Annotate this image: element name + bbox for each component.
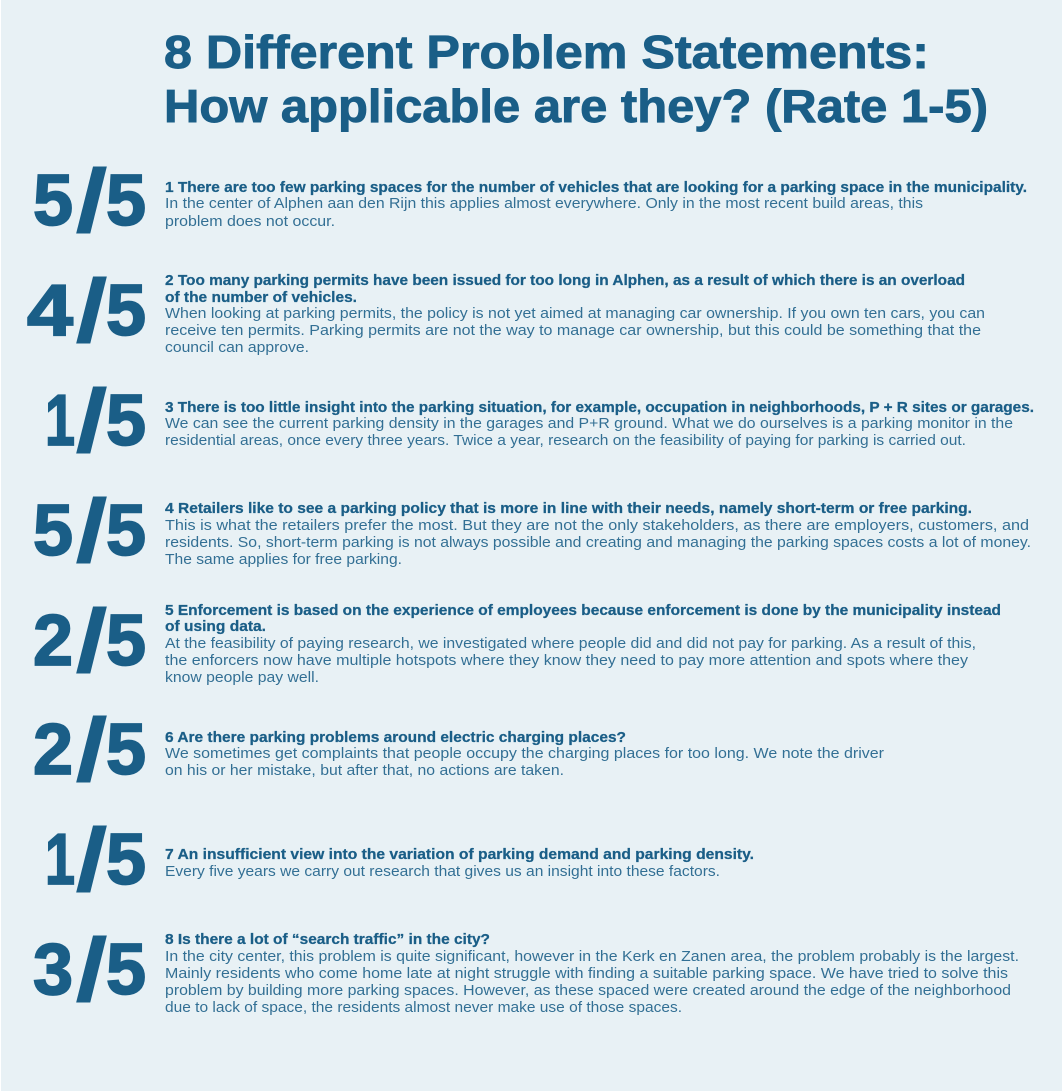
statement 5 text: of using data. — [165, 619, 266, 635]
statement 2 text: receive ten permits. Parking permits are not the way to manage car ownership, but this could be something that the — [165, 323, 981, 339]
rating 2: 4/5: 4 — [27, 271, 73, 351]
statement 2 — [27, 262, 985, 362]
statement 2 text: council can approve. — [165, 340, 309, 356]
statement 3 text: residential areas, once every three years. Twice a year, research on the feasibility of paying for parking is carried out. — [165, 433, 966, 449]
statement 5 text: At the feasibility of paying research, we investigated where people did and did not pay for parking. As a result of this, — [165, 636, 976, 652]
statement 5 text: 5 Enforcement is based on the experience of employees because enforcement is done by the municipality instead — [165, 603, 1001, 619]
statement 3 text: We can see the current parking density in the garages and P+R ground. What we do ourselves is a parking monitor in the — [165, 416, 1013, 432]
statement 6 text: on his or her mistake, but after that, no actions are taken. — [165, 763, 564, 779]
statement 5 text: know people pay well. — [165, 670, 319, 686]
statement 1 text: problem does not occur. — [165, 214, 335, 230]
statement 3 text — [165, 400, 1034, 449]
statement 6 — [33, 701, 884, 801]
statement 6 text: We sometimes get complaints that people occupy the charging places for too long. We note the driver — [165, 746, 884, 762]
rating 8: 3/5: / — [75, 921, 108, 1021]
rating 5: 2/5: / — [75, 592, 108, 692]
rating 6: 2/5: 2 — [33, 710, 73, 790]
rating 7: 1/5: 1 — [45, 820, 75, 900]
rating 6: 2/5: 5 — [106, 710, 146, 790]
rating 2: 4/5: / — [75, 262, 108, 362]
statement 8 text: In the city center, this problem is quite significant, however in the Kerk en Zanen area, the problem probably is the largest. — [165, 949, 1019, 965]
statement 3 text: 3 There is too little insight into the parking situation, for example, occupation in neighborhoods, P + R sites or garages. — [165, 400, 1034, 416]
rating 1: 5/5: 5 — [106, 161, 146, 241]
statement 2 text: When looking at parking permits, the policy is not yet aimed at managing car ownership. If you own ten cars, you can — [165, 306, 985, 322]
rating 7: 1/5: / — [75, 811, 108, 911]
statement 8 text — [165, 932, 1019, 1016]
statement 5 text — [165, 603, 1001, 686]
statement 3 — [45, 372, 1034, 472]
statement 4 text: This is what the retailers prefer the most. But they are not the only stakeholders, as there are employers, customers, and — [165, 518, 1029, 534]
statement 1 text: In the center of Alphen aan den Rijn this applies almost everywhere. Only in the most recent build areas, this — [165, 196, 923, 212]
statement 2 text — [165, 273, 985, 356]
rating 7: 1/5: 5 — [106, 820, 146, 900]
statement 4 text: residents. So, short-term parking is not always possible and creating and managing the parking spaces costs a lot of money. — [165, 535, 1031, 551]
statement 6 text — [165, 730, 884, 779]
statement 6 text: 6 Are there parking problems around electric charging places? — [165, 730, 626, 746]
statement 1 text: 1 There are too few parking spaces for the number of vehicles that are looking for a parking space in the municipality. — [165, 180, 1027, 196]
rating 3: 1/5: / — [75, 372, 108, 472]
rating 2: 4/5: 5 — [106, 271, 146, 351]
title — [164, 26, 988, 132]
rating 5: 2/5: 5 — [106, 601, 146, 681]
statement 8 — [33, 921, 1019, 1021]
statement 1 text — [165, 180, 1027, 230]
statement 8 text: problem by building more parking spaces. However, as these spaced were created around the edge of the neighborhood — [165, 983, 1011, 999]
statement 2 text: of the number of vehicles. — [165, 290, 357, 306]
statement 7 — [45, 811, 754, 911]
statement 7 text — [165, 847, 754, 880]
statement 8 text: Mainly residents who come home late at night struggle with finding a suitable parking space. We have tried to solve this — [165, 966, 1008, 982]
statement 8 text: due to lack of space, the residents almost never make use of those spaces. — [165, 1000, 682, 1016]
rating 3: 1/5: 1 — [45, 381, 75, 461]
title: How applicable are they? (Rate 1-5) — [164, 80, 988, 132]
title: 8 Different Problem Statements: — [164, 26, 929, 78]
statement 7 text: Every five years we carry out research that gives us an insight into these factors. — [165, 864, 720, 880]
statement 4 text: 4 Retailers like to see a parking policy that is more in line with their needs, namely short-term or free parking. — [165, 501, 972, 517]
rating 4: 5/5: 5 — [106, 491, 146, 571]
rating 3: 1/5: 5 — [106, 381, 146, 461]
rating 5: 2/5: 2 — [33, 601, 73, 681]
rating 8: 3/5: 5 — [106, 930, 146, 1010]
statement 4 text — [165, 501, 1031, 568]
statement 5 — [33, 592, 1001, 692]
statement 1 — [33, 152, 1027, 252]
rating 6: 2/5: / — [75, 701, 108, 801]
statement 5 text: the enforcers now have multiple hotspots where they know they need to pay more attention and spots where they — [165, 653, 969, 669]
statement 7 text: 7 An insufficient view into the variation of parking demand and parking density. — [165, 847, 754, 863]
statement 2 text: 2 Too many parking permits have been issued for too long in Alphen, as a result of which there is an overload — [165, 273, 965, 289]
statement 4 text: The same applies for free parking. — [165, 552, 402, 568]
statement 4 — [33, 482, 1031, 582]
statement 8 text: 8 Is there a lot of “search traffic” in the city? — [165, 932, 490, 948]
rating 4: 5/5: / — [75, 482, 108, 582]
rating 1: 5/5: 5 — [33, 161, 73, 241]
rating 4: 5/5: 5 — [33, 491, 73, 571]
rating 1: 5/5: / — [75, 152, 108, 252]
rating 8: 3/5: 3 — [33, 930, 73, 1010]
